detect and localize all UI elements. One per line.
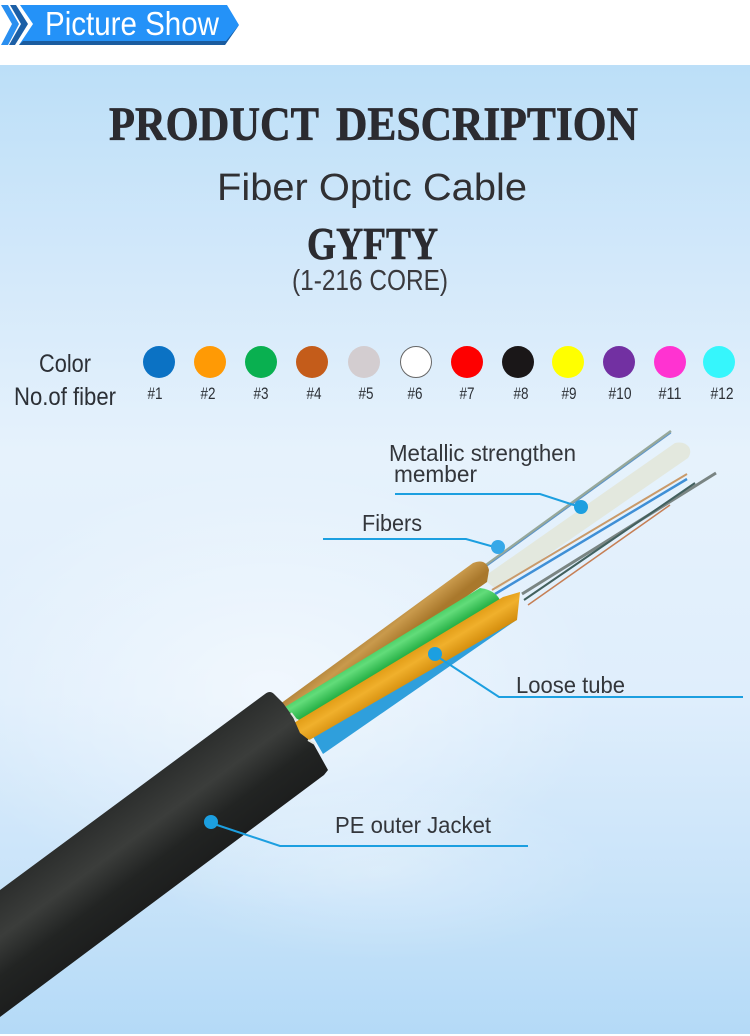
loose tube: blue [312, 621, 515, 754]
fibre numbers: #5 [358, 384, 374, 403]
callout: fibers: Fibers [362, 510, 422, 536]
callout: metallic strengthen member [389, 440, 588, 514]
legend labels: Color [39, 350, 91, 378]
fibre numbers: #2 [200, 384, 216, 403]
loose tube: orange [292, 592, 520, 742]
fibre numbers: #10 [608, 384, 632, 403]
fibre numbers [148, 384, 734, 403]
metallic member wire [486, 431, 671, 566]
callout: loose tube [428, 647, 743, 698]
callout: loose tube: Loose tube [516, 672, 625, 698]
callout: metallic strengthen member: member [394, 461, 477, 487]
fibre numbers: #9 [562, 384, 576, 403]
fibre numbers: #7 [460, 384, 474, 403]
callout: metallic strengthen member: Metallic strengthen [389, 440, 576, 466]
cable illustration [0, 431, 716, 1017]
fibre numbers: #1 [148, 384, 162, 403]
loose tube: brown [280, 562, 489, 714]
loose tube: green [280, 588, 500, 722]
fibre numbers: #3 [254, 384, 268, 403]
subtitle: fiber optic cable: Fiber Optic Cable [217, 167, 527, 209]
colour code legend [14, 346, 735, 411]
colour swatches [143, 346, 735, 378]
white filler tube [482, 442, 690, 590]
callout: PE outer jacket: PE outer Jacket [335, 812, 492, 838]
banner: Picture Show: Picture Show [45, 5, 219, 42]
fibre numbers: #12 [710, 384, 734, 403]
cut edge frays [291, 713, 315, 744]
title: product description [109, 98, 638, 151]
title: product description: DESCRIPTION [336, 98, 638, 151]
legend labels [14, 350, 116, 411]
callout: PE outer jacket [204, 812, 528, 846]
fibre numbers: #4 [306, 384, 322, 403]
fibre numbers: #6 [408, 384, 422, 403]
fibre numbers: #8 [514, 384, 528, 403]
legend labels: No.of fiber [14, 383, 116, 411]
fibre numbers: #11 [658, 384, 682, 403]
fibre bundles [492, 473, 716, 605]
core count: (1-216 CORE) [292, 265, 448, 297]
title: product description: PRODUCT [109, 98, 319, 151]
callout: fibers [323, 510, 505, 554]
outer jacket [0, 692, 328, 1017]
model name: GYFTY: GYFTY [307, 218, 438, 269]
